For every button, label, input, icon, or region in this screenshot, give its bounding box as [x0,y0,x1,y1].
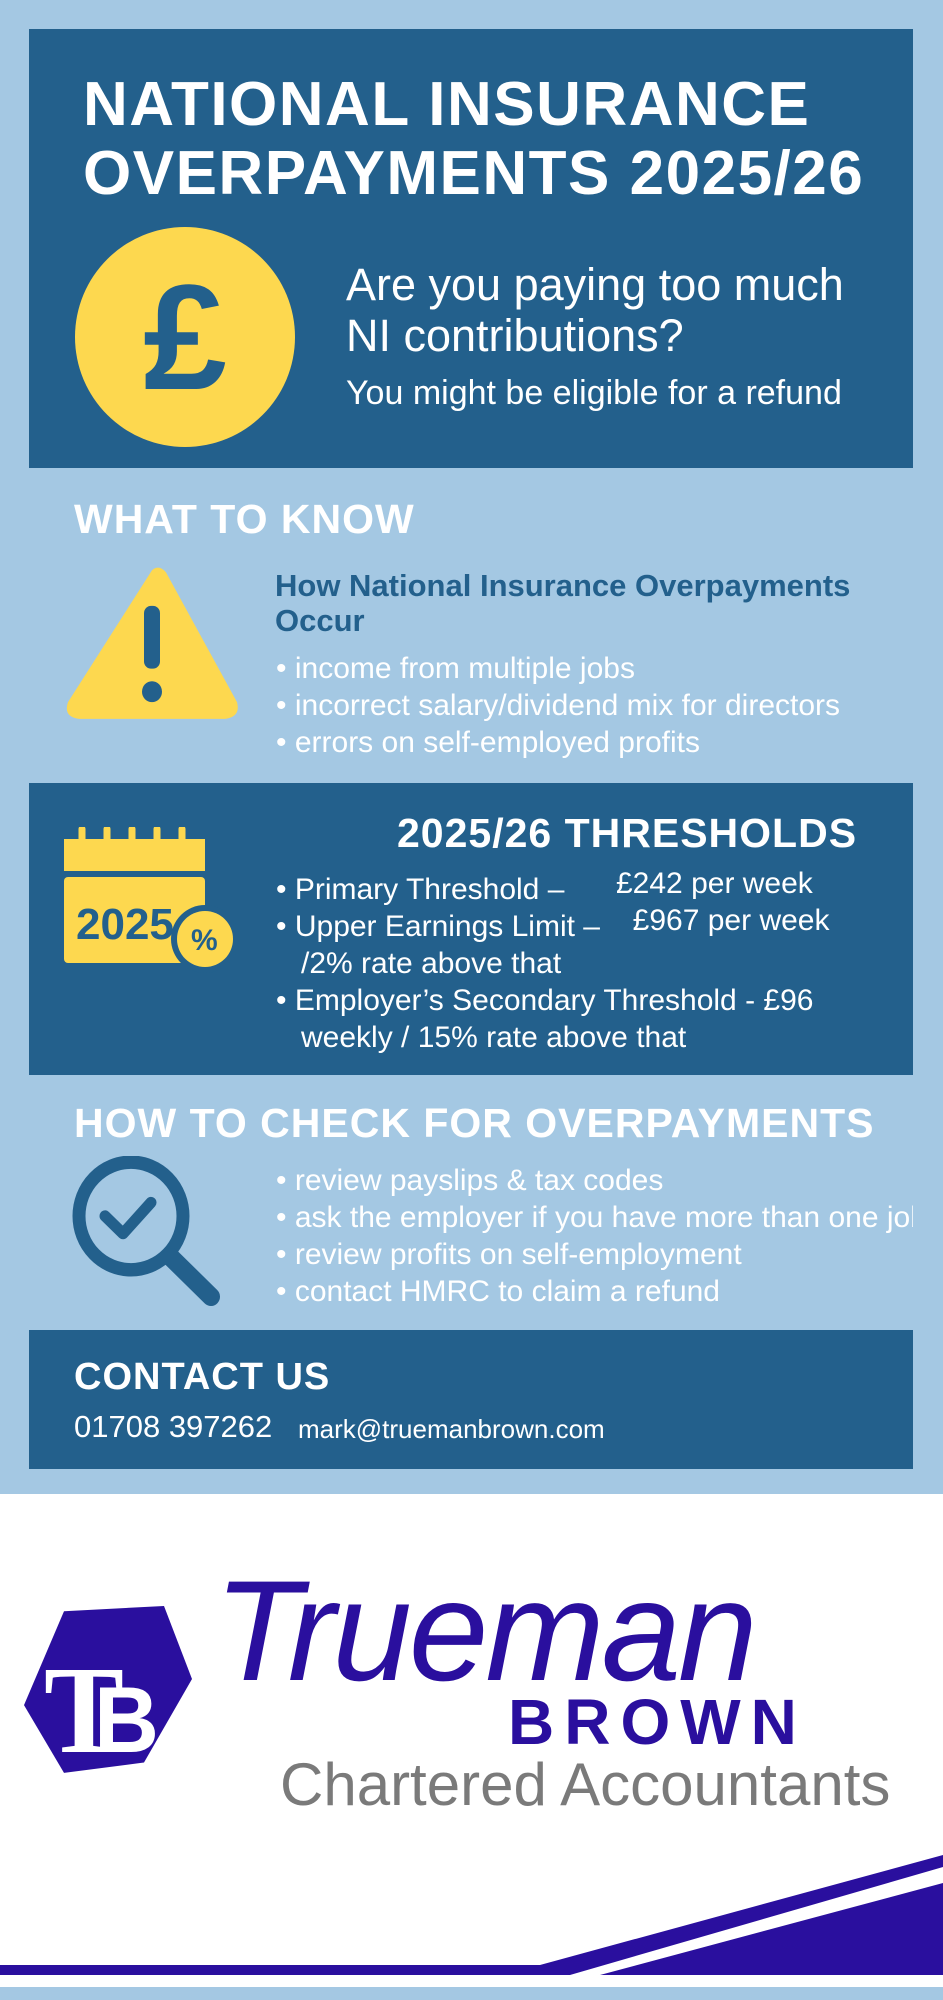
values: £242 per week [616,867,813,900]
contact details: 01708 397262 [74,1409,272,1444]
logo area: Chartered Accountants [280,1751,890,1818]
list: causes: • income from multiple jobs [276,652,635,685]
panel: thresholds [29,783,913,1075]
list: checks: • review profits on self-employment [276,1238,742,1271]
logo area: BROWN [508,1686,807,1758]
values [616,867,830,937]
subtitle question: Are you paying too much [346,259,844,310]
subheading: how overpayments occur: How National Insurance Overpayments [275,568,850,603]
list: thresholds: • Employer’s Secondary Threshold - £96 [276,984,813,1017]
subtitle refund: You might be eligible for a refund [346,374,842,412]
panel: contact: mark@truemanbrown.com [298,1414,604,1444]
list: checks: • review payslips & tax codes [276,1164,663,1197]
list: causes [276,652,840,759]
list: thresholds: • Upper Earnings Limit – [276,910,600,943]
heading: what to know: WHAT TO KNOW [74,496,415,542]
icon: pound coin [75,227,295,447]
icon: calendar 2025: % [191,924,218,957]
logo area [0,1494,943,1987]
subheading: how overpayments occur: Occur [275,603,365,638]
panel: contact [29,1330,913,1469]
icon: calendar 2025 [64,827,233,967]
title: NATIONAL INSURANCE [83,70,810,139]
icon: warning triangle [66,568,238,719]
brand name: Trueman [214,1552,755,1711]
decorative stripes [0,1855,943,1975]
icon: pound coin: £ [143,253,227,421]
list: checks [276,1164,913,1308]
list: thresholds: /2% rate above that [301,947,561,980]
title [83,70,864,208]
list: checks: • contact HMRC to claim a refund [276,1275,720,1308]
subtitle question [346,259,844,361]
list: thresholds: weekly / 15% rate above that [301,1021,686,1054]
subtitle question: NI contributions? [346,310,684,361]
icon: calendar 2025: 2025 [76,900,174,949]
list: causes: • incorrect salary/dividend mix for directors [276,689,840,722]
icon: magnifier [72,1156,220,1306]
list: thresholds [276,873,813,1054]
icon: TB hexagon: B [94,1668,159,1772]
icon: TB hexagon [24,1606,192,1775]
list: causes: • errors on self-employed profits [276,726,700,759]
heading: contact us: CONTACT US [74,1356,330,1398]
title: OVERPAYMENTS 2025/26 [83,139,864,208]
heading: thresholds: 2025/26 THRESHOLDS [397,810,857,856]
heading: how to check: HOW TO CHECK FOR OVERPAYMENTS [74,1100,874,1146]
subheading: how overpayments occur [275,568,850,638]
list: checks: • ask the employer if you have more than one job [276,1201,913,1234]
list: thresholds: • Primary Threshold – [276,873,564,906]
values: £967 per week [633,904,829,937]
panel: header [29,29,913,468]
